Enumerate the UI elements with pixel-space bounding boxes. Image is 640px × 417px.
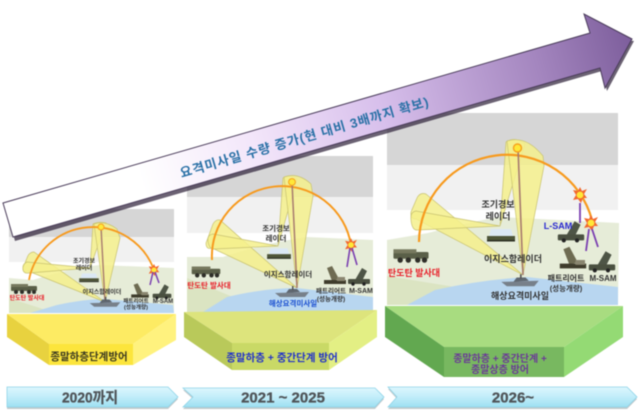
radar beams [411,139,544,275]
intercept points [289,179,357,252]
vehicles [393,221,615,286]
ground and sea [387,217,619,305]
labels [388,198,617,301]
labels: 레이더 [76,264,92,272]
missile trajectory [29,227,154,280]
pedestal [7,314,176,365]
radar beams [206,176,313,288]
timeline: 2020 [7,387,178,409]
labels: 조기경보 [262,223,290,233]
labels: (성능개량) [317,294,345,303]
labels: L-SAM [544,221,572,231]
pedestal caption: 종말상층 방어 [471,363,529,376]
panel: 2021-2025 [184,156,377,370]
labels: 탄도탄 발사대 [10,294,44,302]
labels: 이지스함레이더 [83,288,121,296]
labels: 해상요격미사일 [491,290,549,301]
radar beams [23,222,120,302]
labels: 레이더 [266,233,286,243]
pedestal [184,310,377,370]
vehicles [192,248,370,297]
pedestal caption [453,352,547,376]
sky bands [9,209,174,314]
labels: M-SAM [153,299,173,305]
labels: 패트리어트 [548,273,585,283]
interceptor arrows [347,248,357,267]
labels: (성능개량) [124,303,148,311]
labels: 패트리어트 [123,297,149,305]
interceptor line [101,227,105,302]
vehicles [11,273,171,307]
interceptor line [518,148,523,275]
labels: 이지스함레이더 [484,253,542,264]
labels: (성능개량) [550,283,583,293]
pedestal caption: 종말하층 + 중간단계 방어 [226,351,338,364]
interceptor arrows [150,272,159,285]
labels: 조기경보 [481,198,515,210]
labels: 패트리어트 [316,286,346,295]
sky bands [187,156,373,312]
ground and sea [9,265,174,313]
labels: M-SAM [589,274,617,283]
labels: M-SAM [349,288,373,295]
labels: 해상요격미사일 [269,298,317,308]
period label: 2026~ [492,390,534,406]
labels: 레이더 [486,210,510,222]
panel: through 2020 [7,209,176,365]
pedestal caption: 종말하층단계방어 [50,350,128,363]
intercept points [98,224,159,276]
labels [10,257,173,311]
ground and sea [187,237,373,312]
timeline: 2021-2025 [183,388,384,409]
intercept points [514,144,598,231]
interceptor arrows [580,203,598,251]
missile trajectory [212,186,351,260]
panel: 2026 onward [385,113,623,377]
arrow caption: 요격미사일 수량 증가(현 대비 3배까지 확보) [178,94,430,181]
period label: 2021 ~ 2025 [241,390,325,406]
labels: 탄도탄 발사대 [388,267,440,278]
period label: 2020까지 [62,390,118,406]
pedestal caption: 종말하층 + 중간단계 + [453,352,547,365]
labels: 이지스함레이더 [264,269,312,279]
timeline: 2026 onward [388,387,637,409]
missile trajectory [419,155,592,242]
pedestal [385,306,623,377]
labels [187,223,373,308]
labels: 탄도탄 발사대 [187,280,231,290]
sky bands [387,113,618,306]
interceptor line [292,182,297,288]
labels: 조기경보 [73,257,96,265]
